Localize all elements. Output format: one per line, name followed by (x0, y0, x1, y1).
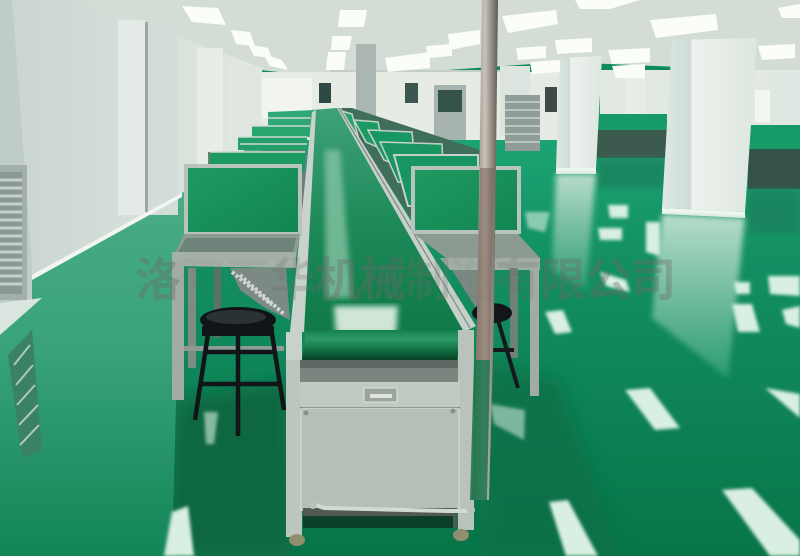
watermark: 公 (585, 254, 631, 306)
far right workstations (337, 108, 480, 232)
right stool (472, 303, 518, 400)
floor light reflections (164, 205, 800, 556)
back wall (260, 44, 570, 140)
watermark: 阳 (180, 254, 226, 306)
right workstation (413, 168, 540, 396)
watermark: 华 (270, 254, 316, 306)
watermark: 限 (540, 254, 586, 306)
left wall (0, 0, 262, 556)
watermark: 天 (225, 254, 271, 306)
watermark: 造 (450, 254, 496, 306)
ceiling (60, 0, 800, 80)
watermark: 洛 (135, 254, 181, 306)
watermark: 机 (315, 254, 361, 306)
middle right column and reflection (552, 56, 602, 290)
watermark: 有 (495, 254, 541, 306)
watermark: 司 (630, 254, 676, 306)
far left workstations (208, 110, 316, 235)
left stool (195, 307, 284, 436)
foot bar (309, 501, 475, 514)
watermark: 械 (360, 254, 406, 306)
ceiling lights (182, 0, 800, 78)
conveyor end frame (286, 330, 474, 537)
conveyor side rails (290, 108, 476, 332)
conveyor belt (300, 108, 472, 360)
levelling feet (289, 529, 469, 546)
large right column and reflection (652, 38, 757, 378)
watermark: 制 (405, 254, 451, 306)
stainless steel pole (470, 0, 498, 500)
left workstation (172, 166, 300, 400)
right back wall and workstations (597, 70, 800, 233)
far columns and rack (500, 66, 645, 151)
left column with vent (0, 0, 42, 458)
